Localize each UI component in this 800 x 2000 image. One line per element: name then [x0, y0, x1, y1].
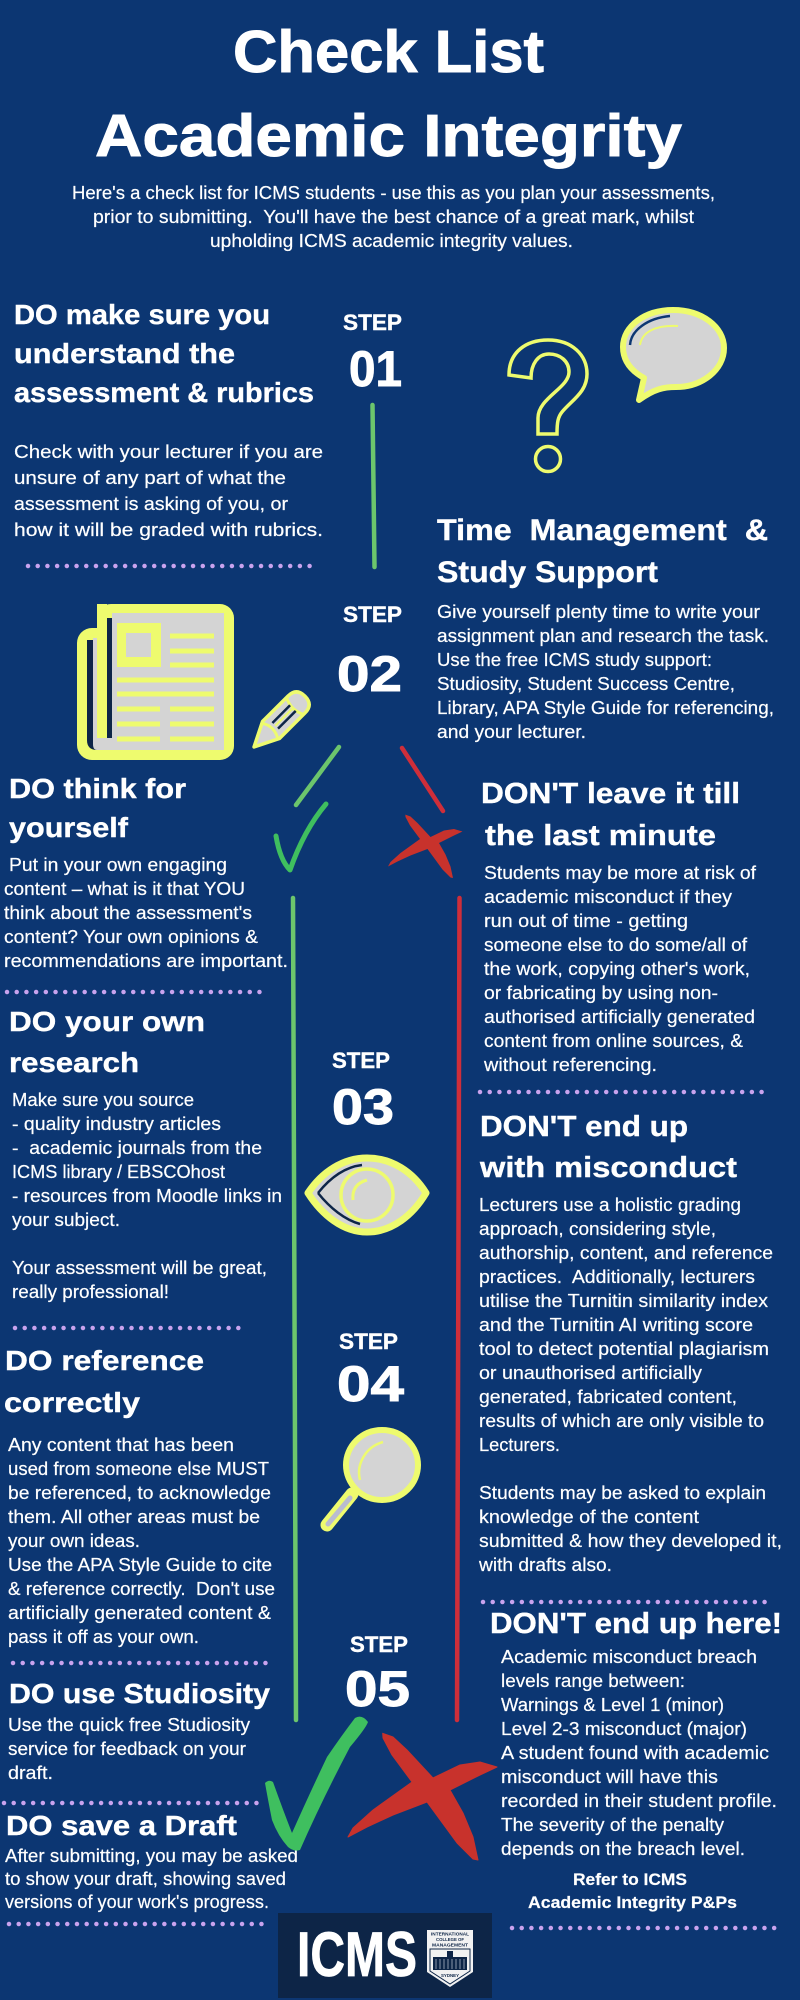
- heading: [9, 773, 186, 843]
- step 02 label: STEP: [343, 602, 402, 627]
- panel: DO save a Draft: [5, 1810, 298, 1912]
- body text: - quality industry articles: [12, 1114, 221, 1134]
- icon: eye: [308, 1158, 426, 1232]
- body text: approach, considering style,: [479, 1219, 716, 1239]
- body text: Check with your lecturer if you are: [14, 442, 323, 462]
- body text: your own ideas.: [8, 1531, 140, 1551]
- body text: content? Your own opinions &: [4, 927, 258, 947]
- body text: submitted & how they developed it,: [479, 1531, 782, 1551]
- body text: [8, 1715, 250, 1783]
- body text: Give yourself plenty time to write your: [437, 602, 760, 622]
- heading: yourself: [9, 812, 129, 843]
- body text: or unauthorised artificially: [479, 1363, 702, 1383]
- body text: and your lecturer.: [437, 722, 586, 742]
- icon: speech bubble: [623, 310, 724, 400]
- body text: - resources from Moodle links in: [12, 1186, 282, 1206]
- heading: research: [9, 1047, 139, 1078]
- step 02 label: 02: [337, 646, 402, 702]
- heading: DO reference: [5, 1345, 204, 1376]
- panel: time management and study support: [437, 514, 774, 742]
- body text: Your assessment will be great,: [12, 1258, 267, 1278]
- body text: A student found with academic: [501, 1743, 769, 1763]
- arrow: long red line: [457, 898, 460, 1720]
- panel: DO reference correctly: [4, 1345, 275, 1647]
- body text: [437, 602, 774, 742]
- body text: academic misconduct if they: [484, 887, 732, 907]
- panel: DO use Studiosity: [8, 1678, 270, 1783]
- arrow: green line step 1: [372, 405, 374, 567]
- body text: recommendations are important.: [4, 951, 288, 971]
- body text: Level 2-3 misconduct (major): [501, 1719, 747, 1739]
- body text: practices. Additionally, lecturers: [479, 1267, 755, 1287]
- body text: Lecturers.: [479, 1435, 560, 1455]
- body text: The severity of the penalty: [501, 1815, 724, 1835]
- step 01 label: STEP: [343, 310, 402, 335]
- body text: [12, 1090, 282, 1302]
- heading: assessment & rubrics: [14, 377, 314, 408]
- body text: tool to detect potential plagiarism: [479, 1339, 769, 1359]
- step 05 label: 05: [345, 1661, 410, 1717]
- step 03 label: [332, 1048, 394, 1135]
- intro text: upholding ICMS academic integrity values.: [210, 231, 573, 251]
- body text: used from someone else MUST: [8, 1459, 269, 1479]
- body text: run out of time - getting: [484, 911, 688, 931]
- body text: content – what is it that YOU: [4, 879, 245, 899]
- heading: [14, 299, 314, 408]
- body text: knowledge of the content: [479, 1507, 699, 1527]
- body text: generated, fabricated content,: [479, 1387, 737, 1407]
- logo: ICMS: ICMS: [297, 1920, 417, 1990]
- step 04 label: STEP: [339, 1329, 398, 1354]
- body text: the work, copying other's work,: [484, 959, 750, 979]
- panel: DO think for yourself: [4, 773, 288, 971]
- body text: & reference correctly. Don't use: [8, 1579, 275, 1599]
- body text: [478, 1195, 782, 1575]
- step 05 label: [345, 1632, 410, 1717]
- body text: misconduct will have this: [501, 1767, 718, 1787]
- icon: shield: COLLEGE OF: [436, 1937, 464, 1942]
- heading: correctly: [4, 1387, 140, 1418]
- body text: Put in your own engaging: [9, 855, 227, 875]
- body text: Students may be asked to explain: [479, 1483, 766, 1503]
- body text: content from online sources, &: [484, 1031, 743, 1051]
- intro text: prior to submitting. You'll have the best chance of a great mark, whilst: [93, 207, 694, 227]
- body text: service for feedback on your: [8, 1739, 246, 1759]
- body text: Make sure you source: [12, 1090, 194, 1110]
- body text: draft.: [8, 1763, 53, 1783]
- body text: without referencing.: [483, 1055, 657, 1075]
- icon: shield: SYDNEY: [441, 1973, 459, 1978]
- body text: really professional!: [12, 1282, 169, 1302]
- icon: shield: [427, 1930, 473, 1987]
- body text: be referenced, to acknowledge: [8, 1483, 271, 1503]
- panel: DON'T end up with misconduct: [478, 1111, 782, 1575]
- heading: DO make sure you: [14, 299, 270, 330]
- step 03 label: STEP: [332, 1048, 390, 1073]
- title: [95, 19, 682, 169]
- body text: - academic journals from the: [12, 1138, 262, 1158]
- body text: results of which are only visible to: [479, 1411, 764, 1431]
- policy reference: Academic Integrity P&Ps: [528, 1893, 737, 1912]
- intro text: Here's a check list for ICMS students - use this as you plan your assessments,: [72, 183, 715, 203]
- body text: levels range between:: [501, 1671, 685, 1691]
- panel: DO your own research: [9, 1006, 282, 1302]
- heading: [9, 1006, 205, 1078]
- body text: Lecturers use a holistic grading: [479, 1195, 741, 1215]
- heading: understand the: [14, 338, 235, 369]
- heading: DO think for: [9, 773, 186, 804]
- body text: them. All other areas must be: [8, 1507, 260, 1527]
- body text: [5, 1846, 298, 1912]
- heading: DON'T end up: [480, 1111, 688, 1143]
- body text: Studiosity, Student Success Centre,: [437, 674, 735, 694]
- body text: Academic misconduct breach: [501, 1647, 757, 1667]
- heading: [479, 1111, 737, 1184]
- body text: someone else to do some/all of: [484, 935, 748, 955]
- body text: your subject.: [12, 1210, 120, 1230]
- heading: Study Support: [437, 556, 658, 589]
- body text: unsure of any part of what the: [14, 468, 286, 488]
- title: Academic Integrity: [95, 103, 682, 169]
- arrow: red diagonal: [402, 748, 443, 811]
- icon: large green check: [265, 1717, 368, 1851]
- step 01 label: [343, 310, 402, 397]
- arrow: long green line: [293, 898, 296, 1720]
- heading: DON'T leave it till: [481, 778, 740, 810]
- body text: After submitting, you may be asked: [5, 1846, 298, 1866]
- heading: the last minute: [485, 820, 716, 852]
- body text: ICMS library / EBSCOhost: [12, 1162, 225, 1182]
- step 02 label: [337, 602, 402, 702]
- policy reference: Refer to ICMS: [573, 1870, 687, 1889]
- panel: DON'T leave it till the last minute: [481, 778, 757, 1075]
- body text: to show your draft, showing saved: [5, 1869, 286, 1889]
- body text: artificially generated content &: [8, 1603, 271, 1623]
- heading: DON'T end up here!: [490, 1608, 782, 1640]
- intro text: [72, 183, 715, 251]
- step 05 label: STEP: [350, 1632, 408, 1657]
- body text: [8, 1435, 275, 1647]
- body text: Use the quick free Studiosity: [8, 1715, 250, 1735]
- body text: Students may be more at risk of: [484, 863, 757, 883]
- body text: authorship, content, and reference: [479, 1243, 773, 1263]
- icon: small red cross: [388, 815, 462, 878]
- body text: assessment is asking of you, or: [14, 494, 288, 514]
- body text: [14, 442, 323, 540]
- arrow: green diagonal: [296, 747, 339, 805]
- body text: depends on the breach level.: [501, 1839, 745, 1859]
- heading: Time Management &: [437, 514, 768, 547]
- body text: [483, 863, 757, 1075]
- body text: think about the assessment's: [4, 903, 252, 923]
- step 03 label: 03: [332, 1079, 394, 1135]
- icon: small green check: [276, 804, 326, 870]
- body text: or fabricating by using non-: [484, 983, 718, 1003]
- body text: Any content that has been: [8, 1435, 234, 1455]
- icon: shield: INTERNATIONAL: [431, 1932, 469, 1936]
- heading: with misconduct: [479, 1152, 737, 1184]
- body text: and the Turnitin AI writing score: [479, 1315, 753, 1335]
- icon: question mark: [509, 340, 587, 472]
- panel: DO understand the assessment: [14, 299, 323, 540]
- body text: pass it off as your own.: [8, 1627, 199, 1647]
- panel: DON'T end up here: [490, 1608, 782, 1912]
- icon: large red cross: [348, 1733, 497, 1860]
- body text: authorised artificially generated: [484, 1007, 755, 1027]
- icon: newspaper: [77, 604, 234, 760]
- body text: Warnings & Level 1 (minor): [501, 1695, 724, 1715]
- step 01 label: 01: [349, 341, 402, 397]
- heading: [4, 1345, 204, 1418]
- body text: Use the free ICMS study support:: [437, 650, 712, 670]
- body text: [501, 1647, 777, 1859]
- step 04 label: 04: [337, 1356, 404, 1412]
- policy reference: [528, 1870, 737, 1912]
- heading: DO your own: [9, 1006, 205, 1037]
- icon: shield: MANAGEMENT: [432, 1942, 468, 1948]
- body text: with drafts also.: [478, 1555, 612, 1575]
- logo: ICMS: [278, 1913, 492, 1998]
- icon: pencil: [246, 688, 313, 755]
- heading: DO save a Draft: [6, 1810, 237, 1841]
- title: Check List: [233, 19, 544, 85]
- body text: versions of your work's progress.: [5, 1892, 269, 1912]
- body text: Library, APA Style Guide for referencing,: [437, 698, 774, 718]
- body text: how it will be graded with rubrics.: [14, 520, 323, 540]
- step 04 label: [337, 1329, 404, 1412]
- body text: [4, 855, 288, 971]
- heading: [437, 514, 768, 589]
- heading: [481, 778, 740, 852]
- body text: Use the APA Style Guide to cite: [8, 1555, 272, 1575]
- body text: utilise the Turnitin similarity index: [479, 1291, 768, 1311]
- body text: assignment plan and research the task.: [437, 626, 769, 646]
- icon: magnifying glass: [327, 1430, 418, 1525]
- heading: DO use Studiosity: [9, 1678, 270, 1709]
- body text: recorded in their student profile.: [501, 1791, 777, 1811]
